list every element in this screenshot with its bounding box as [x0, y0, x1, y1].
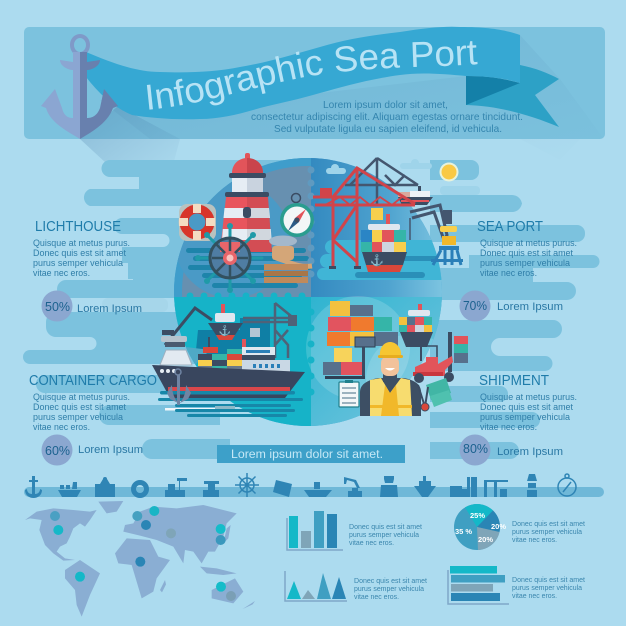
triangle chart	[285, 571, 428, 601]
icon: compass small	[558, 474, 576, 496]
icon: forklift	[413, 332, 468, 383]
block: shipment: Quisque at metus purus.	[480, 392, 577, 402]
block: lighthouse: Lorem Ipsum	[77, 303, 142, 315]
icon: container stack and scale	[323, 301, 398, 379]
icon: clipboard	[339, 380, 359, 407]
icon: dark port crane	[345, 158, 418, 205]
block: shipment: purus semper vehicula	[480, 412, 570, 422]
icon: container ship	[361, 208, 407, 272]
icon row band	[24, 473, 604, 498]
block: container cargo: Lorem Ipsum	[78, 444, 143, 456]
panel: centre circle puzzle	[174, 158, 442, 426]
icon: container ship: ⚓	[370, 254, 384, 267]
icon: lifebuoy small	[131, 480, 149, 498]
icon: ship side small	[304, 482, 332, 497]
icon: small ship: ⚓	[219, 324, 231, 337]
world map	[25, 501, 255, 617]
bar chart: vitae nec eros.	[349, 538, 394, 547]
pie chart: vitae nec eros.	[512, 535, 557, 544]
triangle chart: purus semper vehicula	[354, 584, 425, 593]
block: container cargo: Quisque at metus purus.	[33, 392, 130, 402]
icon: cargo ship	[152, 308, 305, 398]
panel: container cargo quadrant	[170, 297, 311, 432]
pie chart: 20%	[478, 535, 493, 544]
icon: anchor	[41, 36, 118, 139]
background wave blobs	[23, 160, 600, 459]
icon: lighthouse	[220, 153, 272, 252]
block: lighthouse: 50%	[45, 300, 70, 314]
banner panel: Infographic Sea Port	[146, 41, 478, 110]
icon: lighthouse small	[527, 474, 537, 497]
icon: scale small	[165, 478, 187, 497]
block: sea port: Lorem Ipsum	[497, 301, 563, 313]
pie chart: Donec quis est sit amet	[512, 519, 586, 528]
icon: worker small	[380, 476, 398, 497]
block: lighthouse: Donec quis est sit amet	[33, 248, 126, 258]
icon: gray crane	[243, 303, 297, 358]
pie chart: purus semper vehicula	[512, 527, 583, 536]
icon: bollard and rope	[264, 236, 312, 283]
bar chart: purus semper vehicula	[349, 530, 420, 539]
banner panel	[24, 26, 605, 162]
block: shipment: 80%	[463, 442, 488, 456]
ribbon shadow	[100, 35, 604, 160]
block: container cargo: vitae nec eros.	[33, 422, 90, 432]
subtitle: Sed vulputate ligula eu sapien eleifend, id vehicula.	[274, 123, 502, 135]
icon: anchor small	[25, 476, 42, 498]
icon: ship wheel	[195, 223, 262, 293]
horizontal bar chart	[448, 566, 586, 604]
subtitle: consectetur adipiscing elit. Aliquam egestas ornare tincidunt.	[251, 111, 523, 123]
block: sea port: vitae nec eros.	[480, 268, 537, 278]
icon: container small	[95, 477, 115, 497]
block: sea port	[460, 219, 577, 322]
icon: worker	[360, 342, 421, 416]
triangle chart: vitae nec eros.	[354, 592, 399, 601]
icon: compass	[280, 194, 314, 237]
block: shipment: Donec quis est sit amet	[480, 402, 573, 412]
icon: wheel small	[235, 473, 259, 497]
horizontal bar chart: Donec quis est sit amet	[512, 575, 586, 584]
block: lighthouse: purus semper vehicula	[33, 258, 123, 268]
icon: container ship small	[414, 476, 436, 497]
icon: ship small	[58, 482, 81, 497]
icon: distant ship	[398, 186, 433, 205]
icon: crane small	[344, 477, 362, 497]
bar chart	[287, 511, 423, 550]
icon: cards small	[273, 480, 292, 497]
icon: port crane small	[484, 480, 508, 497]
block: sea port: 70%	[463, 299, 487, 313]
subtitle	[251, 99, 523, 135]
ribbon fold	[466, 76, 520, 105]
icon: small cargo ship	[399, 304, 433, 347]
block: lighthouse	[33, 219, 142, 322]
triangle chart: Donec quis est sit amet	[354, 576, 428, 585]
block: lighthouse: vitae nec eros.	[33, 268, 90, 278]
ribbon tail	[466, 65, 559, 127]
ribbon body	[86, 27, 520, 119]
block: sea port: Donec quis est sit amet	[480, 248, 573, 258]
block: shipment: vitae nec eros.	[480, 422, 537, 432]
anchor long shadow	[80, 106, 180, 176]
pie chart: 25%	[470, 511, 485, 520]
icon: small ship	[208, 304, 243, 340]
panel: lighthouse quadrant	[174, 158, 311, 297]
icon: cards and hook	[418, 378, 452, 411]
panel: sea port quadrant	[311, 158, 442, 297]
panel: shipment quadrant	[306, 296, 442, 426]
block: container cargo: purus semper vehicula	[33, 412, 123, 422]
pie chart	[454, 504, 586, 550]
icon: small anchor over ship	[167, 369, 191, 405]
pie chart: 20%	[491, 522, 506, 531]
icon: water lines	[158, 391, 303, 417]
block: container cargo: 60%	[45, 444, 70, 458]
centre caption bar	[217, 445, 405, 463]
block: lighthouse: LICHTHOUSE	[35, 219, 121, 235]
horizontal bar chart: purus semper vehicula	[512, 583, 583, 592]
pie chart: 35 %	[455, 527, 472, 536]
block: sea port: purus semper vehicula	[480, 258, 570, 268]
block: container cargo: CONTAINER CARGO	[29, 373, 157, 389]
block: lighthouse: Quisque at metus purus.	[33, 238, 130, 248]
horizontal bar chart: vitae nec eros.	[512, 591, 557, 600]
icon: bollard small	[203, 481, 219, 497]
block: container cargo	[29, 373, 157, 466]
block: container cargo: Donec quis est sit amet	[33, 402, 126, 412]
block: shipment	[460, 373, 577, 466]
puzzle scallops	[186, 166, 314, 396]
block: shipment: Lorem Ipsum	[497, 446, 563, 458]
centre caption bar: Lorem ipsum dolor sit amet.	[231, 449, 383, 461]
icon: forklift small	[450, 477, 477, 497]
icons: clouds	[326, 159, 480, 195]
block: sea port: SEA PORT	[477, 219, 543, 235]
icon: lifebuoy	[178, 204, 216, 241]
subtitle: Lorem ipsum dolor sit amet,	[323, 99, 448, 111]
block: shipment: SHIPMENT	[479, 373, 549, 389]
icon: sun	[440, 162, 458, 182]
bar chart: Donec quis est sit amet	[349, 522, 423, 531]
title	[146, 64, 480, 110]
icon: red port crane	[313, 168, 415, 269]
block: sea port: Quisque at metus purus.	[480, 238, 577, 248]
icon: yard crane	[410, 205, 463, 265]
